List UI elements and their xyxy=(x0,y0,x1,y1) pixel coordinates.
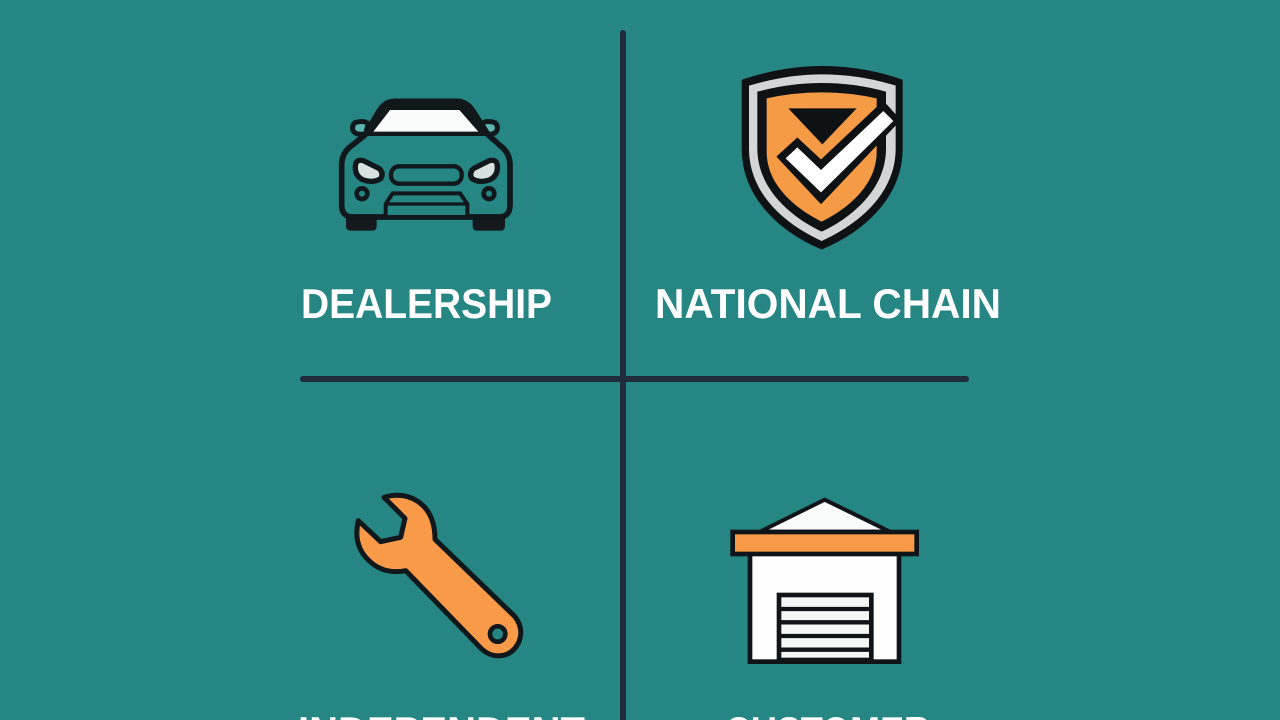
label: national chain: NATIONAL CHAIN xyxy=(655,280,1001,327)
icon: garage xyxy=(733,500,917,662)
icon: shield with check xyxy=(743,68,901,248)
vertical divider xyxy=(620,30,626,720)
icon: car xyxy=(342,100,510,231)
label: dealership: DEALERSHIP xyxy=(301,280,552,327)
icon: wrench xyxy=(357,495,521,656)
windshield with dark roof band xyxy=(367,100,487,136)
horizontal divider xyxy=(300,376,969,382)
